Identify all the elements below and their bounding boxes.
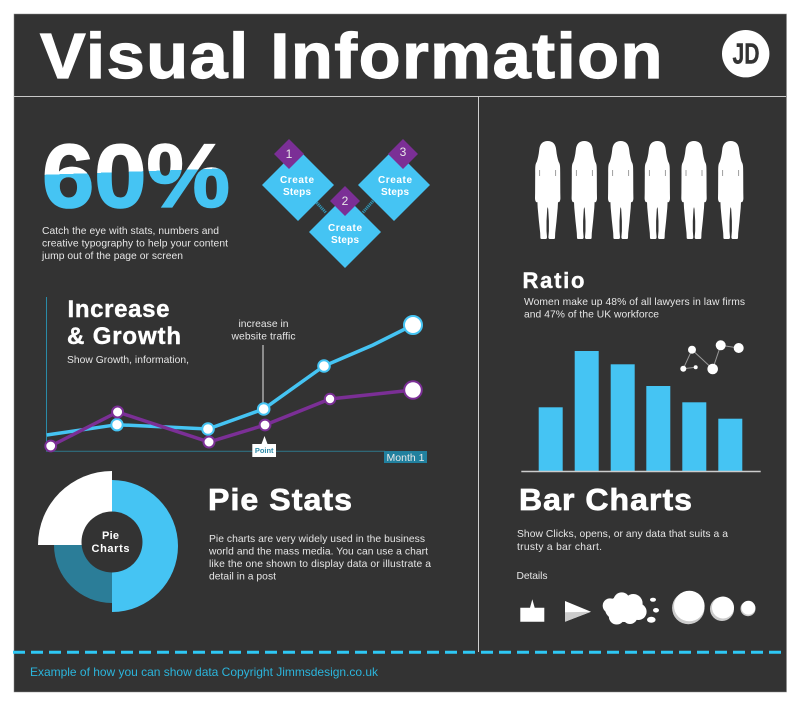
pie label: Pie: [102, 530, 119, 542]
heading: ratio: Ratio: [522, 268, 584, 293]
step 3: Create: [378, 175, 412, 186]
series: purple line: [45, 381, 422, 451]
icon: network nodes: [680, 340, 744, 374]
annotation: increase in website traffic: [230, 319, 296, 405]
pie chart: [38, 471, 178, 612]
logo: JD: [722, 30, 769, 77]
title: Visual Information: [40, 20, 664, 92]
step 2: Create: [328, 223, 362, 234]
annotation: increase in website traffic: increase in: [238, 319, 289, 330]
axis label: month 1: Month 1: [387, 452, 425, 464]
step 1: [262, 139, 334, 221]
pie description: [208, 534, 431, 582]
ratio description: [524, 297, 745, 320]
icon: three spheres: [672, 591, 756, 624]
step 3: 3: [400, 145, 407, 159]
ratio description: Women make up 48% of all lawyers in law firms: [524, 297, 745, 308]
stat: 60%: 60%: [42, 127, 230, 227]
step 1: 1: [286, 147, 293, 161]
pie description: detail in a post: [209, 572, 276, 582]
bar charts description: [517, 529, 728, 553]
heading: increase and growth: Increase: [68, 296, 170, 323]
pie description: Pie charts are very widely used in the business: [209, 534, 425, 545]
step 2: 2: [342, 194, 349, 208]
stat description: creative typography to help your content: [42, 238, 228, 250]
bar charts description: trusty a bar chart.: [517, 542, 602, 553]
step 3: [358, 139, 430, 221]
icon: box with spike: [520, 599, 544, 622]
heading: increase and growth: [67, 296, 181, 350]
icon: cloud: [603, 592, 659, 624]
bar charts description: Show Clicks, opens, or any data that suits a a: [517, 529, 728, 540]
step 3: Steps: [381, 187, 409, 198]
label: details: Details: [516, 571, 548, 582]
panel: big stat: [41, 127, 230, 262]
heading: pie stats: Pie Stats: [208, 482, 353, 517]
stat description: Catch the eye with stats, numbers and: [42, 226, 219, 237]
callout: point: Point: [255, 446, 274, 455]
step 2: [309, 186, 381, 268]
stat description: [41, 226, 228, 262]
pie description: world and the mass media. You can use a chart: [208, 546, 428, 558]
line chart: increase and growth: [45, 296, 427, 464]
panel: create steps diagram: [262, 139, 430, 268]
pie label: [92, 530, 130, 555]
pie label: Charts: [92, 543, 130, 555]
bar chart: [521, 351, 761, 472]
series: blue line: [47, 316, 422, 435]
step 1: Steps: [283, 187, 311, 198]
pie description: like the one shown to display data or illustrate a: [209, 559, 431, 570]
ratio description: and 47% of the UK workforce: [524, 310, 659, 320]
annotation: increase in website traffic: website traffic: [230, 332, 296, 342]
chart subtitle: Show Growth, information,: [67, 355, 189, 366]
heading: bar charts: Bar Charts: [519, 482, 693, 517]
footer text: Example of how you can show data Copyright Jimmsdesign.co.uk: [30, 665, 379, 679]
stat description: jump out of the page or screen: [41, 251, 183, 262]
heading: increase and growth: & Growth: [67, 323, 181, 350]
step 2: Steps: [331, 235, 359, 246]
icons: six women silhouettes: [535, 141, 743, 239]
icon: pointer triangle: [565, 601, 591, 622]
logo: JD: JD: [732, 38, 760, 70]
callout: point: [252, 436, 276, 457]
step 1: Create: [280, 175, 314, 186]
